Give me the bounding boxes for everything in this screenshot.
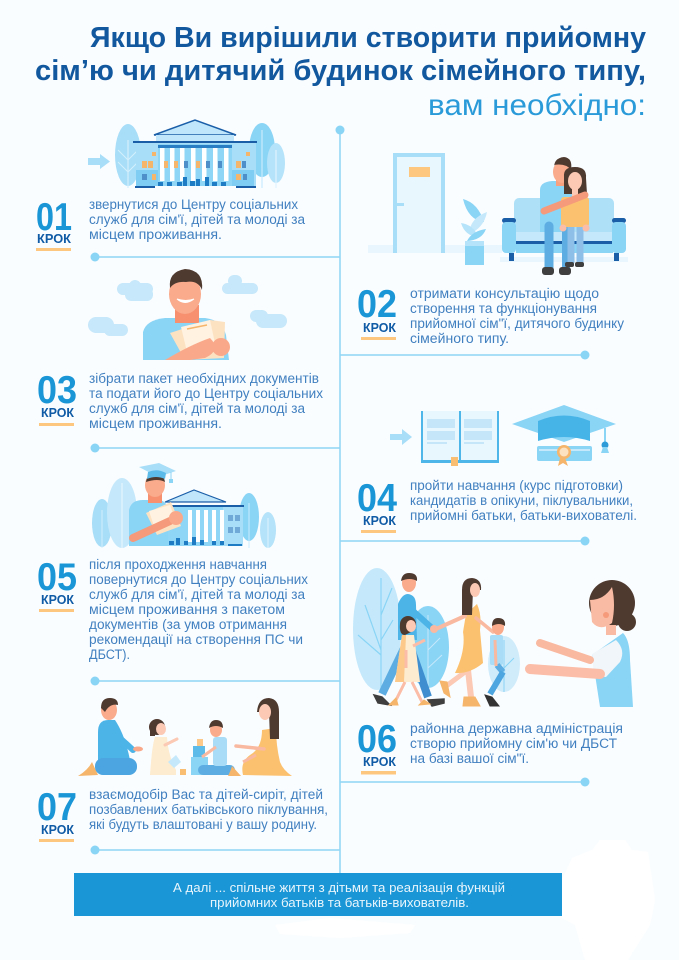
step 05: після проходження навчання xyxy=(89,557,267,572)
step 07: взаємодобір Вас та дітей-сиріт, дітей xyxy=(89,787,323,802)
illustration: door, plant and couple on sofa xyxy=(368,153,628,275)
title: сім’ю чи дитячий будинок сімейного типу, xyxy=(35,55,646,87)
step 06: районна державна адміністрація xyxy=(410,721,623,736)
step 05: ДБСТ). xyxy=(89,647,130,662)
step 02: отримати консультацію щодо xyxy=(410,286,599,301)
step 07: КРОК xyxy=(41,822,74,837)
illustration: graduate with documents at building xyxy=(92,463,276,548)
step 02 xyxy=(357,283,624,346)
step 04: 04 xyxy=(357,477,397,520)
step 04: прийомні батьки, батьки-вихователі. xyxy=(410,508,637,523)
step 02: прийомної сім"ї, дитячого будинку xyxy=(410,316,624,331)
step 01: 01 xyxy=(36,196,72,239)
step 01 xyxy=(36,196,305,251)
step 03 xyxy=(37,369,323,431)
step 05: рекомендації на створення ПС чи xyxy=(89,632,303,647)
illustration: family walking towards a woman xyxy=(353,568,636,707)
illustration: social services building xyxy=(88,120,285,188)
step 07: позбавлених батьківського піклування, xyxy=(89,802,328,817)
step 03: служб для сім'ї, дітей та молоді за xyxy=(89,401,305,416)
closing banner xyxy=(74,873,562,916)
title: Якщо Ви вирішили створити прийомну xyxy=(90,22,646,54)
step 01: місцем проживання. xyxy=(89,227,222,242)
step 01: звернутися до Центру соціальних xyxy=(89,197,298,212)
step 03: та подати його до Центру соціальних xyxy=(89,386,323,401)
step 06: на базі вашої сім"ї. xyxy=(410,751,529,766)
closing banner: прийомних батьків та батьків-вихователів. xyxy=(210,895,469,910)
title xyxy=(35,22,646,122)
step 05: КРОК xyxy=(41,592,74,607)
step 01: КРОК xyxy=(37,231,71,246)
step 05: 05 xyxy=(37,556,77,599)
step 02: КРОК xyxy=(363,320,396,335)
step 07: які будуть влаштовані у вашу родину. xyxy=(89,817,317,832)
step 02: 02 xyxy=(357,283,397,326)
step 05: служб для сім'ї, дітей та молоді за xyxy=(89,587,305,602)
step 06: 06 xyxy=(357,718,397,761)
step 03: місцем проживання. xyxy=(89,416,222,431)
illustration: family playing with blocks xyxy=(78,698,292,776)
step 02: сімейного типу. xyxy=(410,331,509,346)
step 06: КРОК xyxy=(363,754,396,769)
step 05: документів (за умов отримання xyxy=(89,617,287,632)
step 04 xyxy=(357,477,637,533)
step 07: 07 xyxy=(37,786,77,829)
step 05 xyxy=(37,556,308,662)
step 05: повернутися до Центру соціальних xyxy=(89,572,308,587)
step 04: пройти навчання (курс підготовки) xyxy=(410,478,623,493)
step 02: створення та функціонування xyxy=(410,301,597,316)
step 03: КРОК xyxy=(41,405,74,420)
step 03: зібрати пакет необхідних документів xyxy=(89,371,319,386)
step 04: КРОК xyxy=(363,513,396,528)
illustration: man with documents and clouds xyxy=(88,269,287,360)
step 01: служб для сім'ї, дітей та молоді за xyxy=(89,212,305,227)
timeline connectors xyxy=(90,126,590,873)
step 04: кандидатів в опікуни, піклувальники, xyxy=(410,493,633,508)
illustration: book, graduation cap and diploma xyxy=(390,405,616,466)
step 03: 03 xyxy=(37,369,77,412)
step 06: створю прийомну сім'ю чи ДБСТ xyxy=(410,736,617,751)
title: вам необхідно: xyxy=(428,89,646,122)
step 06 xyxy=(357,718,623,774)
step 07 xyxy=(37,786,328,842)
closing banner: А далі ... спільне життя з дітьми та реалізація функцій xyxy=(173,880,505,895)
step 05: місцем проживання з пакетом xyxy=(89,602,285,617)
